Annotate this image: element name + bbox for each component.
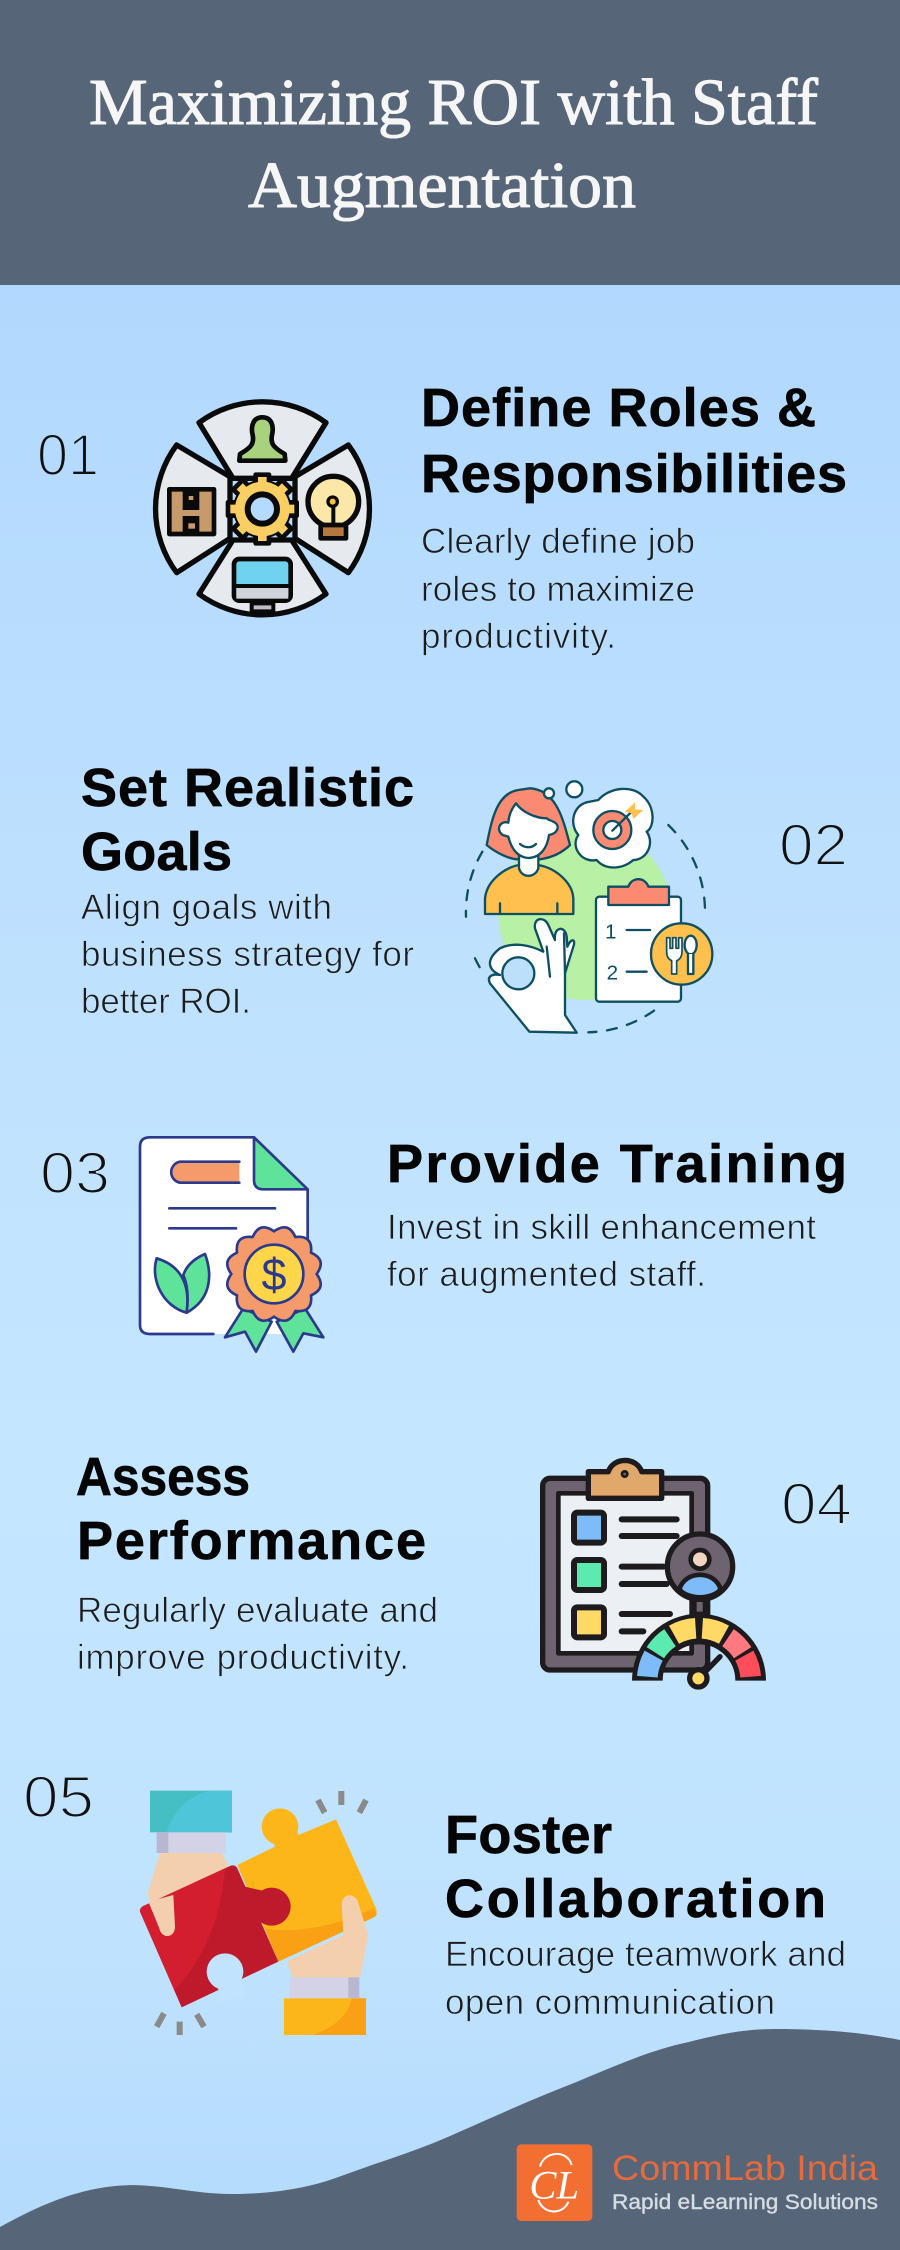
heading: [81, 758, 414, 882]
description: roles to maximize: [421, 570, 695, 609]
logo mark: CL: [529, 2162, 579, 2207]
heading: [421, 378, 847, 504]
description: open communication: [445, 1983, 775, 2022]
logo mark: [517, 2144, 592, 2221]
footer wave: [0, 2029, 900, 2250]
description: Invest in skill enhancement: [387, 1208, 816, 1247]
heading: Responsibilities: [421, 444, 847, 504]
icon: clipboard with gauge: [543, 1460, 751, 1687]
number 04: 04: [781, 1472, 852, 1537]
heading: Define Roles &: [421, 378, 816, 438]
description: Encourage teamwork and: [445, 1935, 846, 1974]
icon: certificate with rosette: [140, 1137, 323, 1352]
description: [445, 1935, 846, 2022]
heading: [445, 1805, 826, 1929]
description: better ROI.: [81, 982, 251, 1021]
number 05: 05: [23, 1765, 94, 1830]
icon: certificate with rosette: $: [261, 1249, 287, 1300]
description: for augmented staff.: [387, 1255, 706, 1294]
heading: [76, 1447, 426, 1571]
heading: Assess: [76, 1447, 250, 1507]
number 01: 01: [37, 423, 99, 488]
description: [421, 522, 695, 656]
logo tagline: Rapid eLearning Solutions: [612, 2191, 878, 2214]
description: [77, 1591, 438, 1677]
heading: Goals: [81, 822, 232, 882]
heading: Foster: [445, 1805, 612, 1865]
title: Maximizing ROI with Staff: [89, 66, 818, 139]
heading: Set Realistic: [81, 758, 414, 818]
heading: Performance: [77, 1511, 426, 1571]
panel: step 1 define roles: [37, 378, 847, 656]
number 03: 03: [40, 1141, 110, 1206]
panel: step 2 set goals: [81, 758, 848, 1033]
icon: gear with four segments: [156, 402, 369, 615]
description: Regularly evaluate and: [77, 1591, 438, 1630]
panel: step 5 foster collaboration: [23, 1765, 846, 2035]
panel: step 3 provide training: [40, 1134, 847, 1352]
description: [387, 1208, 816, 1294]
logo name: CommLab India: [612, 2149, 879, 2188]
icon: person, target and clipboard: 1: [605, 920, 616, 943]
description: [81, 888, 414, 1021]
panel: step 4 assess performance: [76, 1447, 852, 1687]
icon: person, target and clipboard: [466, 781, 712, 1033]
icon: person, target and clipboard: 2: [607, 961, 618, 984]
heading: Provide Training: [387, 1134, 847, 1194]
heading: Collaboration: [445, 1869, 826, 1929]
title: Augmentation: [248, 149, 636, 222]
description: Align goals with: [81, 888, 332, 927]
header banner: [0, 0, 900, 285]
description: business strategy for: [81, 935, 414, 974]
description: improve productivity.: [77, 1638, 409, 1677]
logo: CommLab India: [517, 2144, 879, 2221]
icon: hands joining puzzle pieces: [140, 1791, 377, 2035]
description: productivity.: [421, 617, 616, 656]
description: Clearly define job: [421, 522, 695, 561]
number 02: 02: [779, 813, 848, 878]
title: [89, 66, 818, 222]
